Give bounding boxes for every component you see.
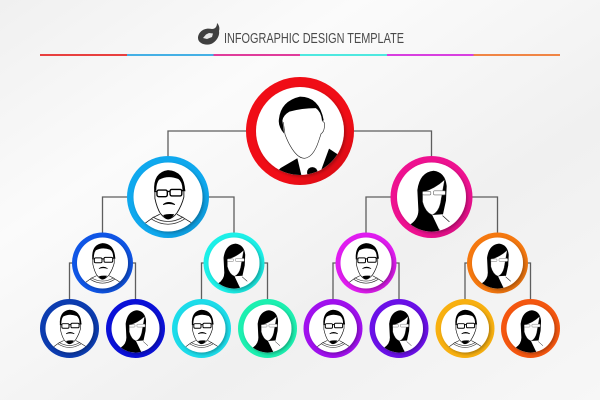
- header logo icon: [198, 23, 219, 45]
- avatar: woman: [252, 310, 280, 352]
- avatar: woman: [515, 310, 543, 352]
- avatar: man with glasses: [145, 170, 192, 224]
- node: level 3 magenta: [336, 232, 396, 294]
- node: right director: [390, 156, 472, 238]
- node: level 4 amber: [436, 299, 494, 358]
- node: level 4 purple: [304, 299, 362, 358]
- node: level 4 navy: [40, 299, 99, 358]
- node: level 4 deep blue: [106, 299, 165, 358]
- title: INFOGRAPHIC DESIGN TEMPLATE: [224, 31, 404, 47]
- avatar: man in suit: [272, 97, 342, 178]
- node: left director: [127, 156, 209, 238]
- avatar: woman: [218, 244, 247, 288]
- colour divider bar: [40, 54, 560, 56]
- node: level 3 orange: [467, 232, 528, 294]
- node: top manager: [246, 77, 354, 185]
- avatar: woman: [384, 310, 411, 352]
- node: level 4 orange red: [501, 299, 560, 358]
- avatar: woman: [481, 244, 511, 288]
- avatar: man with glasses: [349, 243, 384, 283]
- connector lines: [70, 131, 530, 302]
- avatar: man with glasses: [54, 310, 86, 347]
- avatar: man with glasses: [86, 243, 120, 283]
- node: level 4 violet: [370, 299, 428, 358]
- node: level 4 mint: [238, 299, 297, 358]
- avatar: man with glasses: [186, 310, 218, 347]
- node: level 3 cyan: [204, 232, 264, 294]
- avatar: woman: [409, 171, 449, 232]
- avatar: man with glasses: [317, 310, 350, 347]
- avatar: woman: [120, 310, 148, 352]
- avatar: man with glasses: [449, 310, 482, 347]
- node: level 3 blue: [72, 232, 133, 294]
- node: level 4 light cyan: [172, 299, 231, 358]
